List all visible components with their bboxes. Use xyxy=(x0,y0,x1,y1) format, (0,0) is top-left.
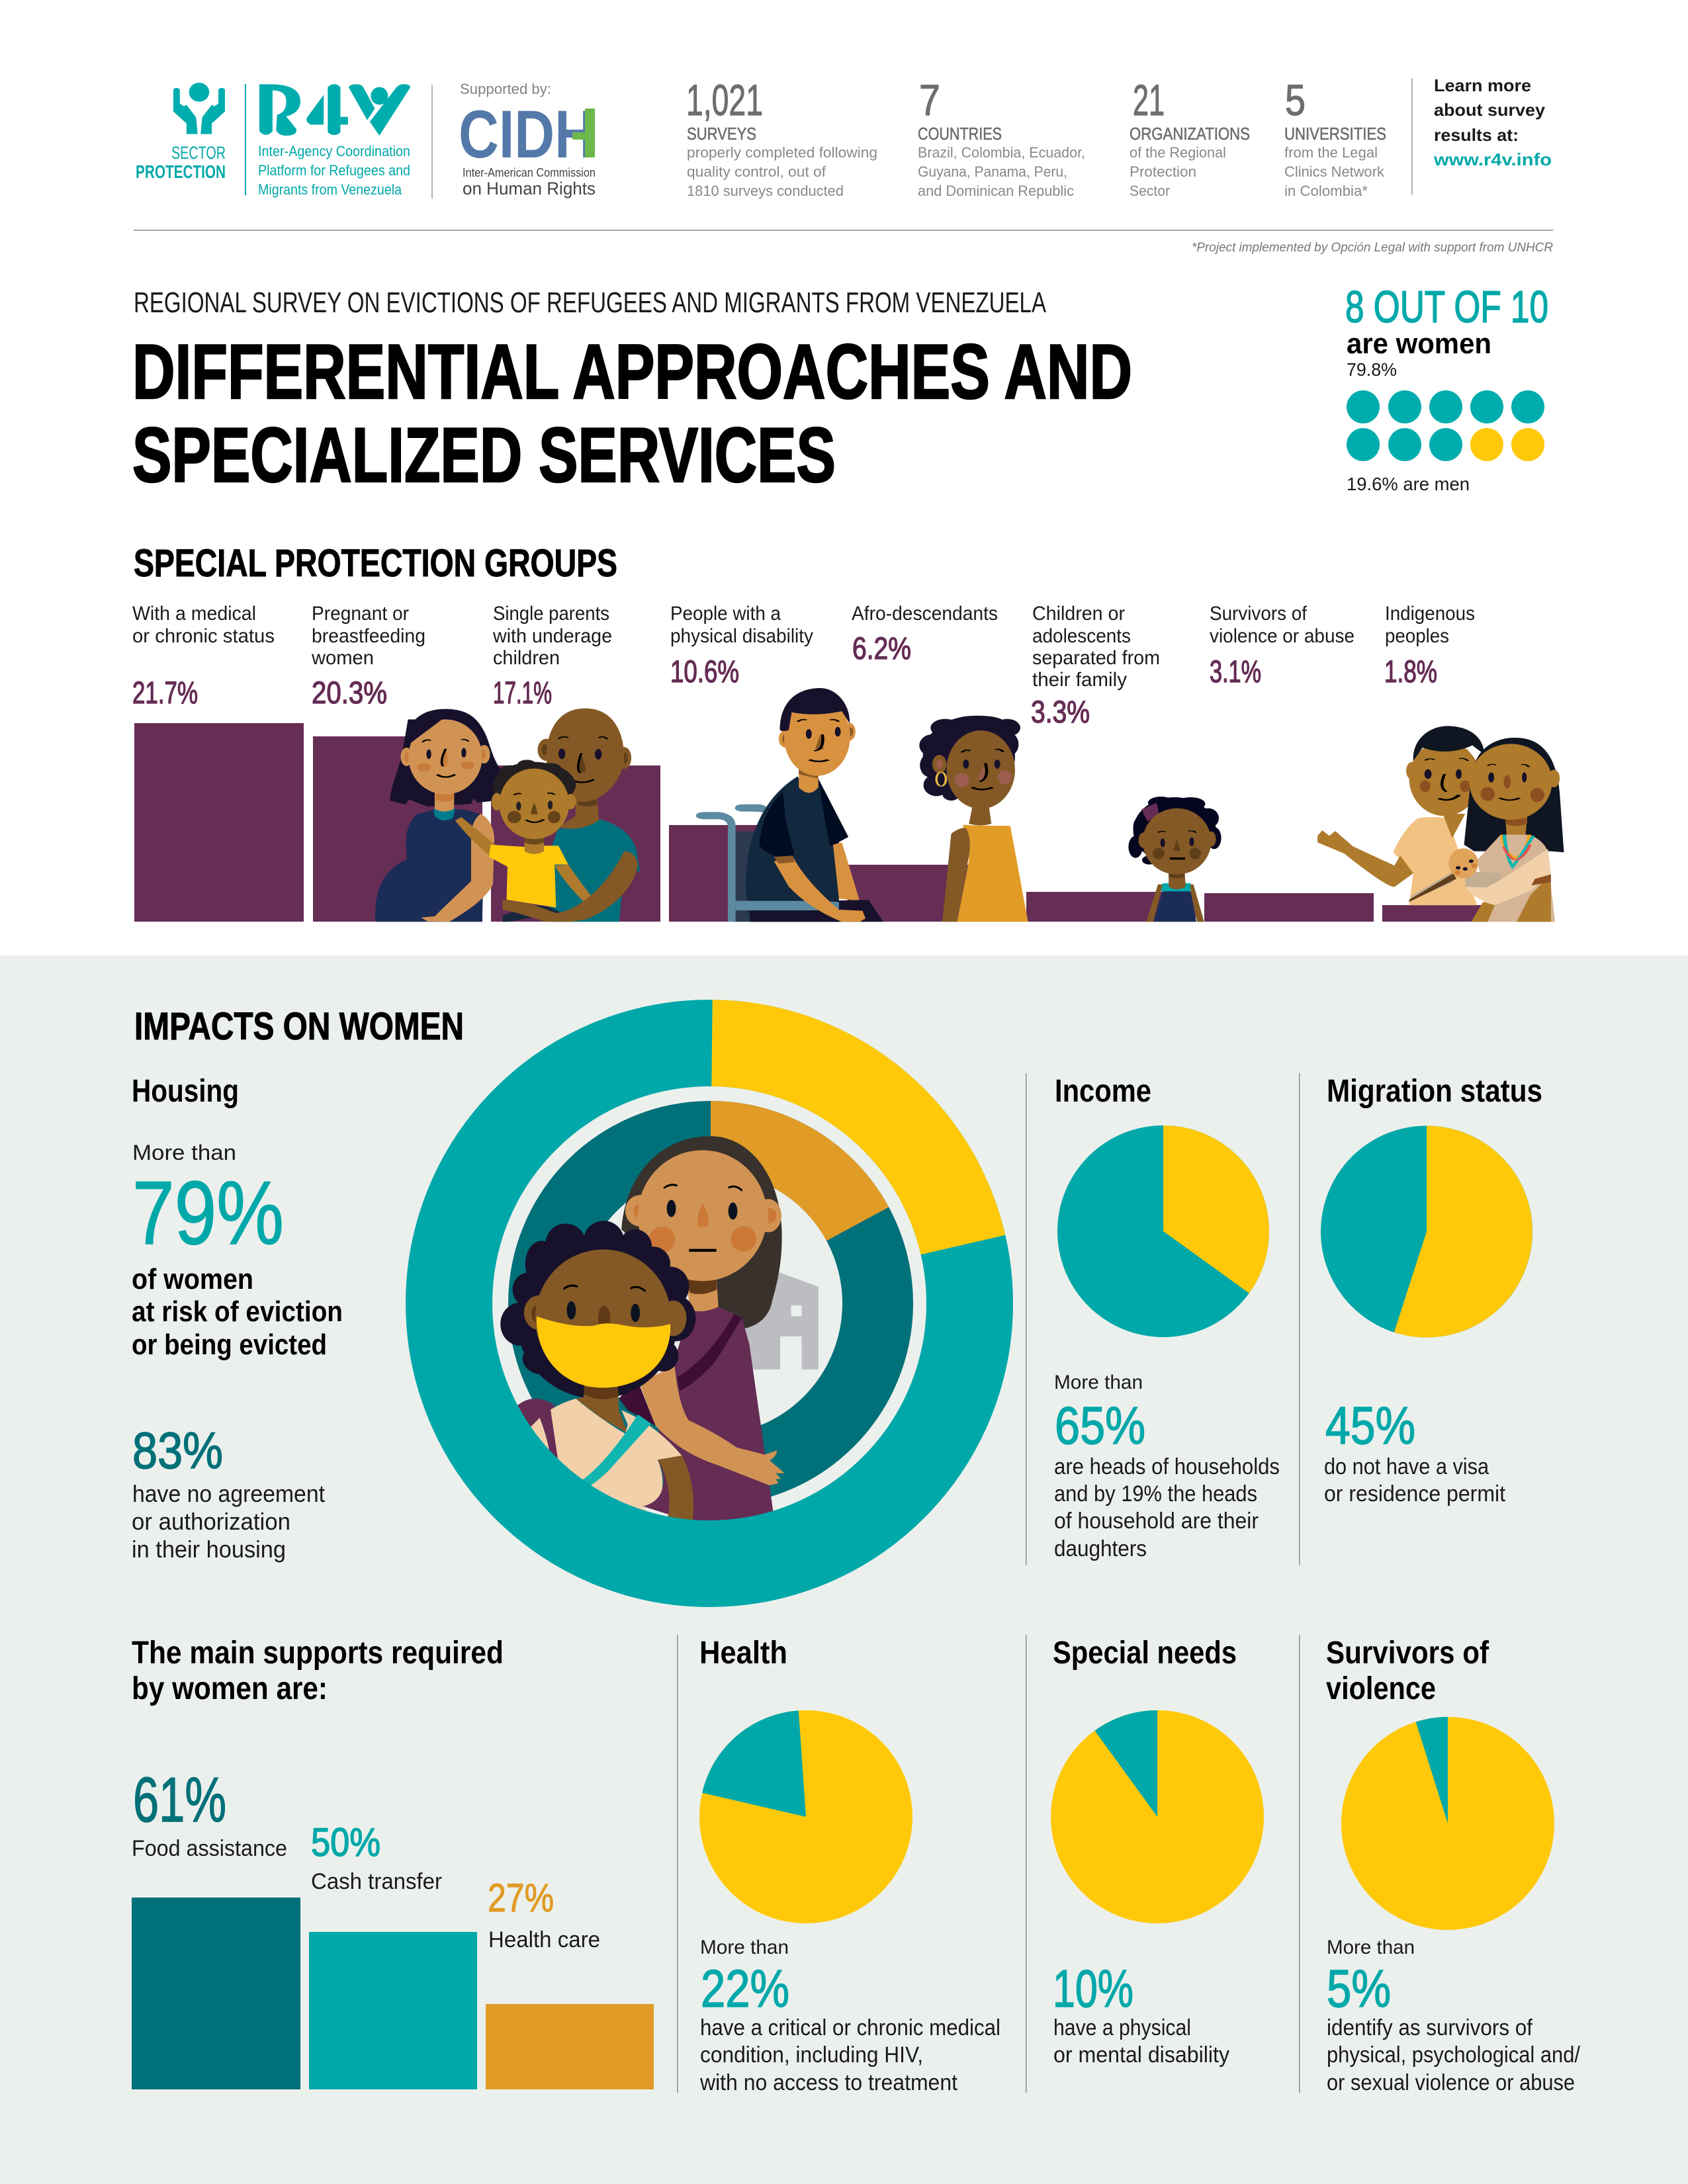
panel: main supports required: 50% xyxy=(311,1820,380,1864)
panel: special needs: 10% xyxy=(1053,1959,1133,2018)
label: survivors xyxy=(1210,603,1355,689)
panel: 8 out of 10 are women: 8 OUT OF 10 xyxy=(1345,282,1548,332)
label: survivors: 3.1% xyxy=(1210,654,1261,689)
label: single parents: with underage xyxy=(492,625,612,647)
group labels and percentages xyxy=(132,603,1475,729)
R4V platform description: Migrants from Venezuela xyxy=(258,181,402,198)
header: logos and survey figures xyxy=(136,75,1552,199)
stat: organizations: Protection xyxy=(1130,163,1196,180)
panel: health: Health xyxy=(699,1636,787,1671)
learn more link: Learn more xyxy=(1434,75,1531,95)
label: disability: 10.6% xyxy=(670,654,739,689)
label: children separated: separated from xyxy=(1032,647,1160,669)
pie chart: migration xyxy=(1321,1126,1533,1338)
label: children separated: adolescents xyxy=(1032,625,1131,647)
label: pregnant xyxy=(311,603,425,710)
label: indigenous: peoples xyxy=(1385,625,1449,647)
illustration: pregnant woman, father and child xyxy=(375,709,640,922)
icon: protection sector hands xyxy=(173,83,225,134)
supported by CIDH logo: Inter-American Commission xyxy=(463,166,596,179)
label: children separated: their family xyxy=(1032,669,1127,691)
supported by CIDH logo: CIDH xyxy=(459,97,595,172)
panel: health: condition, including HIV, xyxy=(700,2042,923,2068)
label: children separated xyxy=(1031,603,1160,729)
label: afro-descendants: 6.2% xyxy=(852,631,911,666)
yellow arc xyxy=(712,1043,963,1245)
illustration: indigenous family xyxy=(1317,726,1564,922)
label: disability: People with a xyxy=(670,603,781,625)
stat: surveys xyxy=(686,75,877,199)
pie chart: survivors xyxy=(1341,1717,1554,1930)
panel: main supports required: 27% xyxy=(488,1876,554,1920)
bar chart: supports xyxy=(132,1898,654,2089)
panel: 8 out of 10 are women: 19.6% are men xyxy=(1347,474,1470,494)
label: pregnant: women xyxy=(311,647,374,669)
father xyxy=(537,709,640,922)
icon: ten-dot ratio xyxy=(1347,390,1544,461)
learn more link: about survey xyxy=(1434,100,1546,120)
panel: special needs xyxy=(1026,1635,1264,2093)
pie chart: health xyxy=(699,1710,912,1923)
panel: income: 65% xyxy=(1055,1396,1145,1455)
label: single parents: 17.1% xyxy=(493,675,552,710)
title block xyxy=(132,286,1132,498)
panel: main supports required: by women are: xyxy=(132,1671,328,1706)
label: children separated: Children or xyxy=(1032,603,1125,625)
stat: universities: 5 xyxy=(1285,75,1306,124)
panel: health xyxy=(677,1635,1000,2095)
stat: universities: from the Legal xyxy=(1284,144,1378,161)
panel: migration status: do not have a visa xyxy=(1324,1454,1489,1479)
stat: countries: Guyana, Panama, Peru, xyxy=(918,163,1067,180)
stat: surveys: properly completed following xyxy=(687,144,877,161)
stat: universities: in Colombia* xyxy=(1284,183,1368,199)
stat: organizations: Sector xyxy=(1130,183,1170,199)
panel: main supports required: 61% xyxy=(133,1765,226,1835)
panel: income: More than xyxy=(1054,1372,1143,1393)
stat: organizations: ORGANIZATIONS xyxy=(1130,124,1250,144)
pie chart: income xyxy=(1057,1125,1269,1337)
supported by CIDH logo xyxy=(459,81,596,198)
illustration: afro-descendant woman xyxy=(919,716,1028,922)
pregnant woman xyxy=(375,709,505,922)
panel: main supports required: The main supports required xyxy=(132,1636,504,1671)
stat: universities xyxy=(1284,75,1386,199)
sector protection label xyxy=(136,143,226,182)
sector protection label: PROTECTION xyxy=(136,161,226,182)
panel: housing: at risk of eviction xyxy=(132,1295,343,1328)
learn more link: results at: xyxy=(1434,125,1519,145)
label: disability xyxy=(670,603,813,689)
panel: income: Income xyxy=(1055,1074,1151,1109)
footnote: *Project implemented by Opción Legal with support from UNHCR xyxy=(1192,241,1553,255)
stat: countries: and Dominican Republic xyxy=(918,183,1074,199)
panel: migration status xyxy=(1299,1073,1542,1565)
pie chart: special needs xyxy=(1051,1710,1264,1923)
panel: special needs: or mental disability xyxy=(1053,2042,1229,2068)
learn more link xyxy=(1433,75,1552,169)
stat: countries: 7 xyxy=(919,75,940,124)
illustration: house, mother and masked child xyxy=(500,1136,819,1540)
bar chart: protection groups xyxy=(134,723,1552,922)
panel: income: and by 19% the heads xyxy=(1054,1481,1257,1507)
R4V platform description: Platform for Refugees and xyxy=(258,162,410,179)
panel: health: More than xyxy=(700,1937,789,1958)
label: pregnant: 20.3% xyxy=(312,675,387,710)
sector protection label: SECTOR xyxy=(171,143,226,163)
label: pregnant: breastfeeding xyxy=(312,625,425,647)
stat: countries: Brazil, Colombia, Ecuador, xyxy=(918,144,1085,161)
panel: special needs: have a physical xyxy=(1053,2015,1191,2040)
donut chart with mother and child xyxy=(449,1043,970,1564)
panel: migration status: or residence permit xyxy=(1324,1481,1506,1507)
panel: income: of household are their xyxy=(1054,1508,1259,1534)
panel: income: daughters xyxy=(1054,1536,1147,1561)
label: medical xyxy=(132,603,275,710)
heading: impacts on women: IMPACTS ON WOMEN xyxy=(134,1005,464,1048)
panel: housing: in their housing xyxy=(132,1536,286,1563)
label: survivors: Survivors of xyxy=(1210,603,1308,625)
panel: health: have a critical or chronic medical xyxy=(700,2015,1000,2040)
label: medical: 21.7% xyxy=(132,675,198,710)
panel: housing: 79% xyxy=(132,1162,284,1263)
stat: surveys: 1810 surveys conducted xyxy=(687,183,844,199)
label: indigenous: Indigenous xyxy=(1385,603,1475,625)
title block: REGIONAL SURVEY ON EVICTIONS OF REFUGEES AND MIGRANTS FROM VENEZUELA xyxy=(134,286,1046,319)
learn more link: www.r4v.info xyxy=(1433,150,1552,169)
stat: organizations xyxy=(1130,75,1250,199)
logo: R4V xyxy=(259,84,410,136)
title block: DIFFERENTIAL APPROACHES AND xyxy=(132,328,1132,415)
label: disability: physical disability xyxy=(670,625,813,647)
panel: survivors of violence: physical, psychological and/ xyxy=(1327,2042,1580,2068)
panel: main supports required xyxy=(132,1636,654,2089)
panel: survivors of violence: Survivors of xyxy=(1326,1636,1489,1671)
panel: 8 out of 10 are women: are women xyxy=(1347,328,1491,360)
panel: survivors of violence xyxy=(1299,1635,1580,2095)
panel: housing: have no agreement xyxy=(132,1480,325,1507)
stat: countries xyxy=(918,75,1085,199)
panel: housing: 83% xyxy=(132,1421,223,1479)
stat: organizations: of the Regional xyxy=(1130,144,1226,161)
label: afro-descendants xyxy=(852,603,998,666)
label: single parents: children xyxy=(493,647,560,669)
panel: housing xyxy=(132,1074,343,1563)
stat: surveys: 1,021 xyxy=(686,75,763,124)
panel: housing: Housing xyxy=(132,1074,239,1109)
label: indigenous: 1.8% xyxy=(1384,654,1437,689)
panel: housing: or being evicted xyxy=(132,1329,327,1361)
label: single parents xyxy=(492,603,612,710)
stat: surveys: quality control, out of xyxy=(687,163,826,180)
R4V platform description: Inter-Agency Coordination xyxy=(258,143,410,159)
stat: organizations: 21 xyxy=(1133,75,1165,124)
stat: universities: UNIVERSITIES xyxy=(1284,124,1386,144)
panel: main supports required: Cash transfer xyxy=(311,1869,442,1894)
panel: migration status: 45% xyxy=(1325,1396,1415,1455)
label: medical: With a medical xyxy=(132,603,256,625)
label: medical: or chronic status xyxy=(132,625,275,647)
orange arc xyxy=(711,1137,858,1224)
illustration: man in wheelchair xyxy=(696,688,883,922)
panel: survivors of violence: More than xyxy=(1327,1937,1415,1958)
father arm xyxy=(503,852,638,922)
stat: countries: COUNTRIES xyxy=(918,124,1002,144)
panel: housing: or authorization xyxy=(132,1508,290,1535)
panel: survivors of violence: identify as survivors of xyxy=(1327,2015,1533,2040)
panel: housing: of women xyxy=(132,1263,253,1295)
supported by CIDH logo: Supported by: xyxy=(460,81,551,97)
R4V platform description xyxy=(258,143,410,198)
stat: universities: Clinics Network xyxy=(1284,163,1385,180)
panel: income: are heads of households xyxy=(1054,1454,1280,1479)
label: children separated: 3.3% xyxy=(1031,694,1090,729)
label: survivors: violence or abuse xyxy=(1210,625,1355,647)
label: single parents: Single parents xyxy=(493,603,609,625)
panel: migration status: Migration status xyxy=(1327,1074,1542,1109)
heading: special protection groups: SPECIAL PROTECTION GROUPS xyxy=(134,542,617,585)
panel: income xyxy=(1026,1073,1280,1565)
child in yellow shirt xyxy=(455,760,592,922)
illustration: separated child xyxy=(1128,797,1222,922)
supported by CIDH logo: on Human Rights xyxy=(463,179,596,198)
title block: SPECIALIZED SERVICES xyxy=(132,412,836,498)
stat: surveys: SURVEYS xyxy=(687,124,756,144)
label: pregnant: Pregnant or xyxy=(312,603,409,625)
panel: health: 22% xyxy=(701,1959,789,2018)
panel: health: with no access to treatment xyxy=(699,2070,958,2095)
panel: housing: More than xyxy=(132,1141,236,1164)
panel: main supports required: Health care xyxy=(488,1927,600,1952)
panel: survivors of violence: 5% xyxy=(1327,1959,1391,2018)
panel: 8 out of 10 are women xyxy=(1345,282,1548,494)
panel: 8 out of 10 are women: 79.8% xyxy=(1347,359,1397,380)
label: indigenous xyxy=(1384,603,1475,689)
panel: survivors of violence: or sexual violence or abuse xyxy=(1327,2070,1575,2095)
panel: survivors of violence: violence xyxy=(1326,1671,1436,1706)
panel: special needs: Special needs xyxy=(1053,1636,1237,1671)
label: afro-descendants: Afro-descendants xyxy=(852,603,998,625)
panel: main supports required: Food assistance xyxy=(132,1836,287,1861)
